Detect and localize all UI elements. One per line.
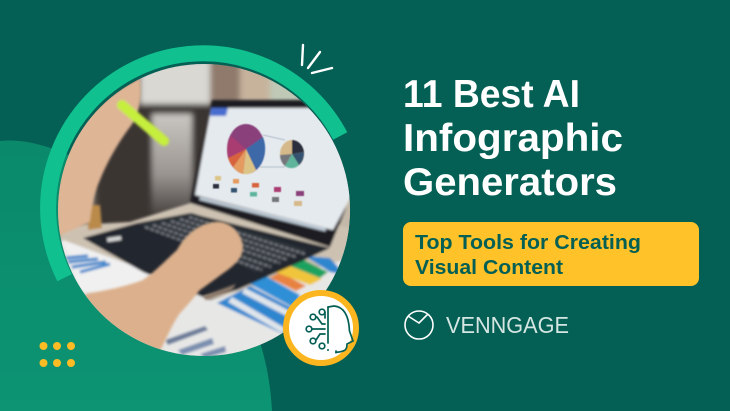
Venngage logo: VENNGAGE — [446, 312, 569, 338]
desk strip — [60, 200, 360, 300]
grey blue bars — [165, 326, 208, 345]
keyboard keys — [145, 217, 305, 270]
laptop base — [83, 213, 330, 297]
sparkle lines — [302, 45, 332, 73]
laptop lid — [190, 100, 360, 247]
decorative yellow dots — [40, 342, 75, 367]
subtitle banner — [403, 222, 699, 286]
blue stripes lower-right — [217, 286, 296, 334]
rainbow chart strips — [270, 272, 306, 291]
typing arm and hand — [84, 220, 245, 350]
raised arm with pen — [58, 78, 142, 236]
green ring arc — [48, 53, 340, 278]
blue stripes upper-left paper — [66, 256, 110, 272]
title: Generators — [403, 161, 617, 204]
title — [403, 73, 623, 204]
Venngage logo — [405, 311, 569, 339]
paper — [60, 240, 360, 360]
title: Infographic — [403, 117, 623, 160]
subtitle banner: Visual Content — [415, 256, 563, 279]
background blob — [0, 141, 272, 411]
title: 11 Best AI — [403, 73, 580, 116]
icon: AI head badge — [286, 293, 356, 363]
secondary pie chart — [280, 140, 304, 168]
screen — [195, 108, 360, 230]
chart legend swatches — [215, 176, 221, 180]
main pie chart — [227, 124, 265, 174]
subtitle banner: Top Tools for Creating — [415, 231, 641, 254]
photo: person using laptop with pie chart — [50, 60, 360, 360]
